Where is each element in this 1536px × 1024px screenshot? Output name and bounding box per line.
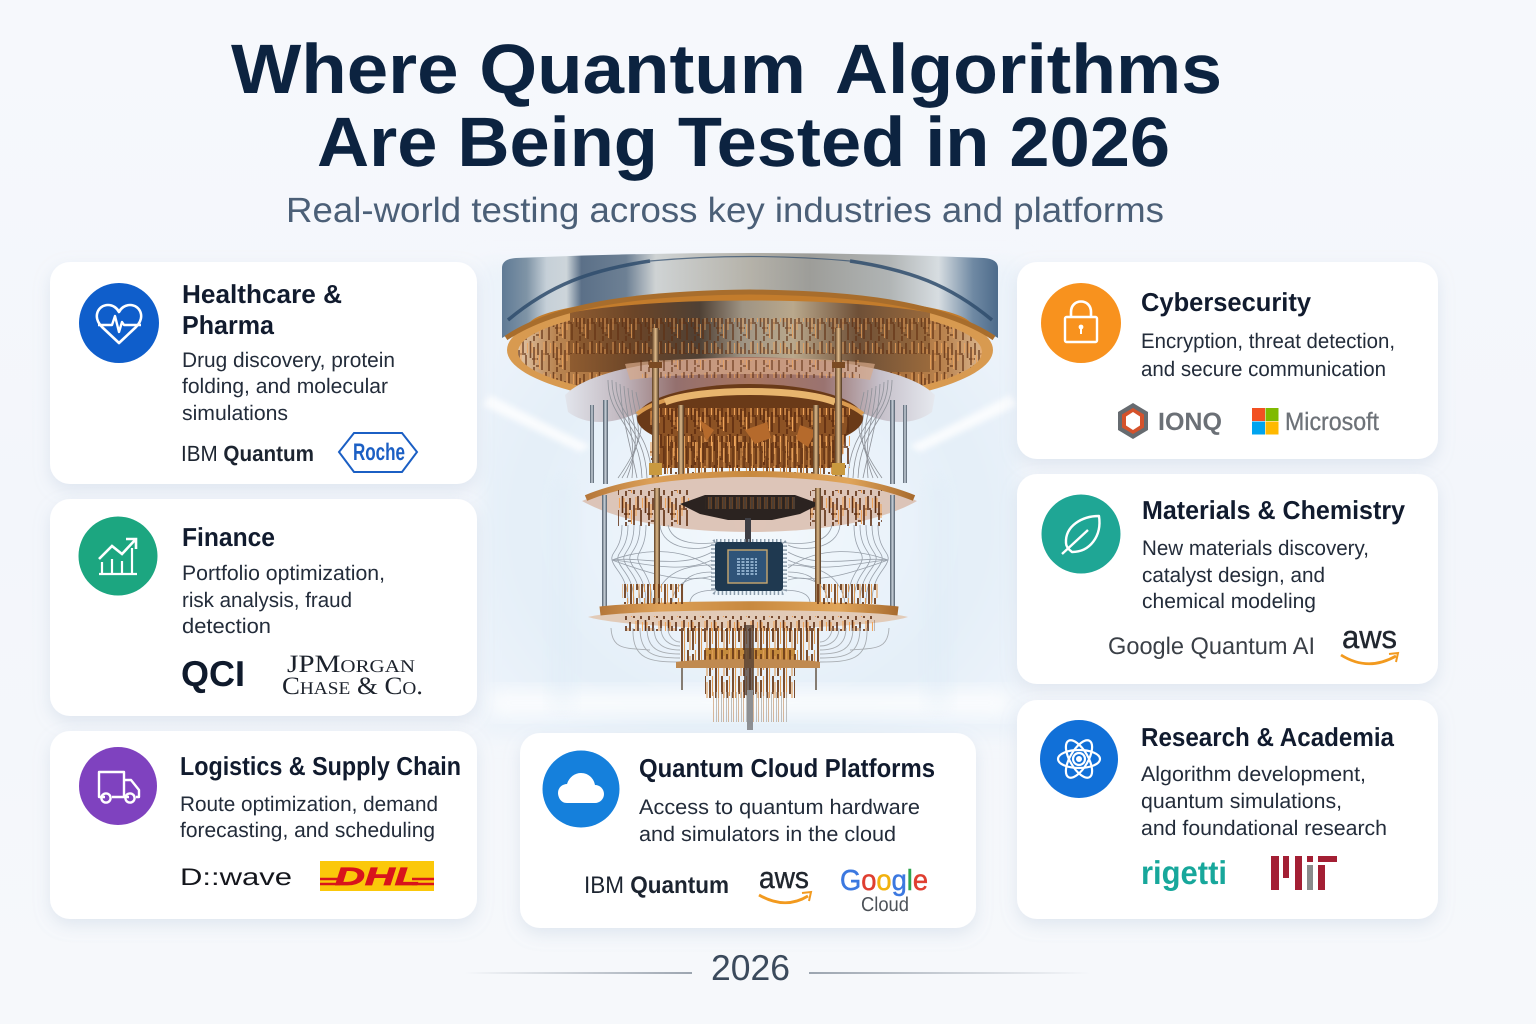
heading: Materials & Chemistry [1142,495,1406,525]
description: Route optimization, demand [180,793,438,816]
panel: logistics & supply chain [50,731,477,919]
logo: Google Cloud: Google [840,865,928,897]
panel: quantum cloud platforms [520,733,976,928]
bottom copper stage [676,625,820,730]
description: Access to quantum hardware [639,796,920,819]
panel: finance [50,499,477,716]
heading: Cybersecurity [1141,287,1312,317]
logo: Rigetti: rigetti [1141,854,1227,891]
logo: Google Cloud [840,865,928,916]
logo: IBM Quantum: IBM Quantum [181,441,314,466]
title: Are Being Tested in 2026 [317,103,1170,181]
description: chemical modeling [1142,590,1316,613]
description: catalyst design, and [1142,564,1325,587]
logo: Google Cloud: Cloud [861,894,909,916]
logo: DHL [320,861,434,891]
heading: Research & Academia [1141,722,1394,752]
heading: Pharma [182,310,275,340]
logo: IonQ [1118,403,1222,439]
title: Algorithms [835,30,1222,108]
description [1141,763,1387,840]
lower wire bundles [612,525,888,603]
panel: research & academia [1017,700,1438,919]
logo: Microsoft [1252,408,1379,436]
icon: growth chart [78,516,158,596]
silver middle drum [565,357,935,422]
description: Encryption, threat detection, [1141,330,1395,353]
steel top cylinder [502,253,998,338]
description: folding, and molecular [182,375,388,398]
description [1141,330,1395,381]
logo: AWS: aws [1342,619,1397,655]
icon: cloud [542,750,620,828]
description [1142,537,1369,613]
icon: padlock [1041,283,1121,363]
description: and simulators in the cloud [639,823,896,846]
logo: MIT [1271,856,1337,890]
heading: Quantum Cloud Platforms [639,753,935,783]
description: New materials discovery, [1142,537,1369,560]
icon: heart pulse [79,283,159,363]
title [231,30,1222,181]
logo: QCI: QCI [181,653,245,694]
logo: IonQ: IONQ [1158,408,1222,436]
central illustration: quantum computer chandelier [480,253,1020,737]
description: risk analysis, fraud [182,589,352,612]
description: detection [182,615,271,638]
heading [182,279,342,340]
description: and secure communication [1141,358,1386,381]
icon: atom [1040,720,1118,798]
footer year timeline: 2026 [711,947,790,988]
logo: Google Quantum AI: Google Quantum AI [1108,633,1315,660]
middle gold ring [582,474,917,532]
logo: JPMorgan Chase & Co.: JPMorgan [287,651,415,678]
quantum processor chip [713,541,785,593]
vertical support rods, upper [590,328,907,484]
description: Portfolio optimization, [182,562,385,585]
panel: healthcare & pharma [50,262,477,484]
description: Drug discovery, protein [182,349,395,372]
panel: cybersecurity [1017,262,1438,459]
description: and foundational research [1141,817,1387,840]
bottom loop wires [611,628,889,662]
logo: IBM Quantum: IBM Quantum [584,872,729,899]
logo: DHL: DHL [335,863,420,891]
icon: truck [79,747,157,825]
logo: JPMorgan Chase & Co. [282,651,423,700]
panel: materials & chemistry [1017,474,1438,684]
icon: leaf [1042,494,1120,574]
description [182,562,385,638]
description: simulations [182,402,288,425]
heading: Finance [182,522,275,552]
description [180,793,438,842]
description: Algorithm development, [1141,763,1366,786]
logo: Microsoft: Microsoft [1285,408,1379,436]
upper wire bundles [608,380,892,478]
logo: Roche: Roche [353,439,405,466]
description [182,349,395,425]
copper inner disk and components [637,384,863,474]
logo: Roche [339,433,417,472]
logo: D-Wave: D::wave [180,864,292,891]
subtitle: Real-world testing across key industries and platforms [286,191,1164,230]
description [639,796,920,846]
description: forecasting, and scheduling [180,819,435,842]
heading: Logistics & Supply Chain [180,751,461,781]
glowing chamber backdrop [480,262,1020,737]
description: quantum simulations, [1141,790,1342,813]
vertical support rods, lower [602,488,895,608]
logo: JPMorgan Chase & Co.: Chase & Co. [282,673,423,700]
logo: AWS: aws [759,862,809,895]
heading: Healthcare & [182,279,342,309]
title: Where Quantum [231,30,806,108]
lower gold ring [588,584,908,631]
copper base plate [507,294,993,390]
